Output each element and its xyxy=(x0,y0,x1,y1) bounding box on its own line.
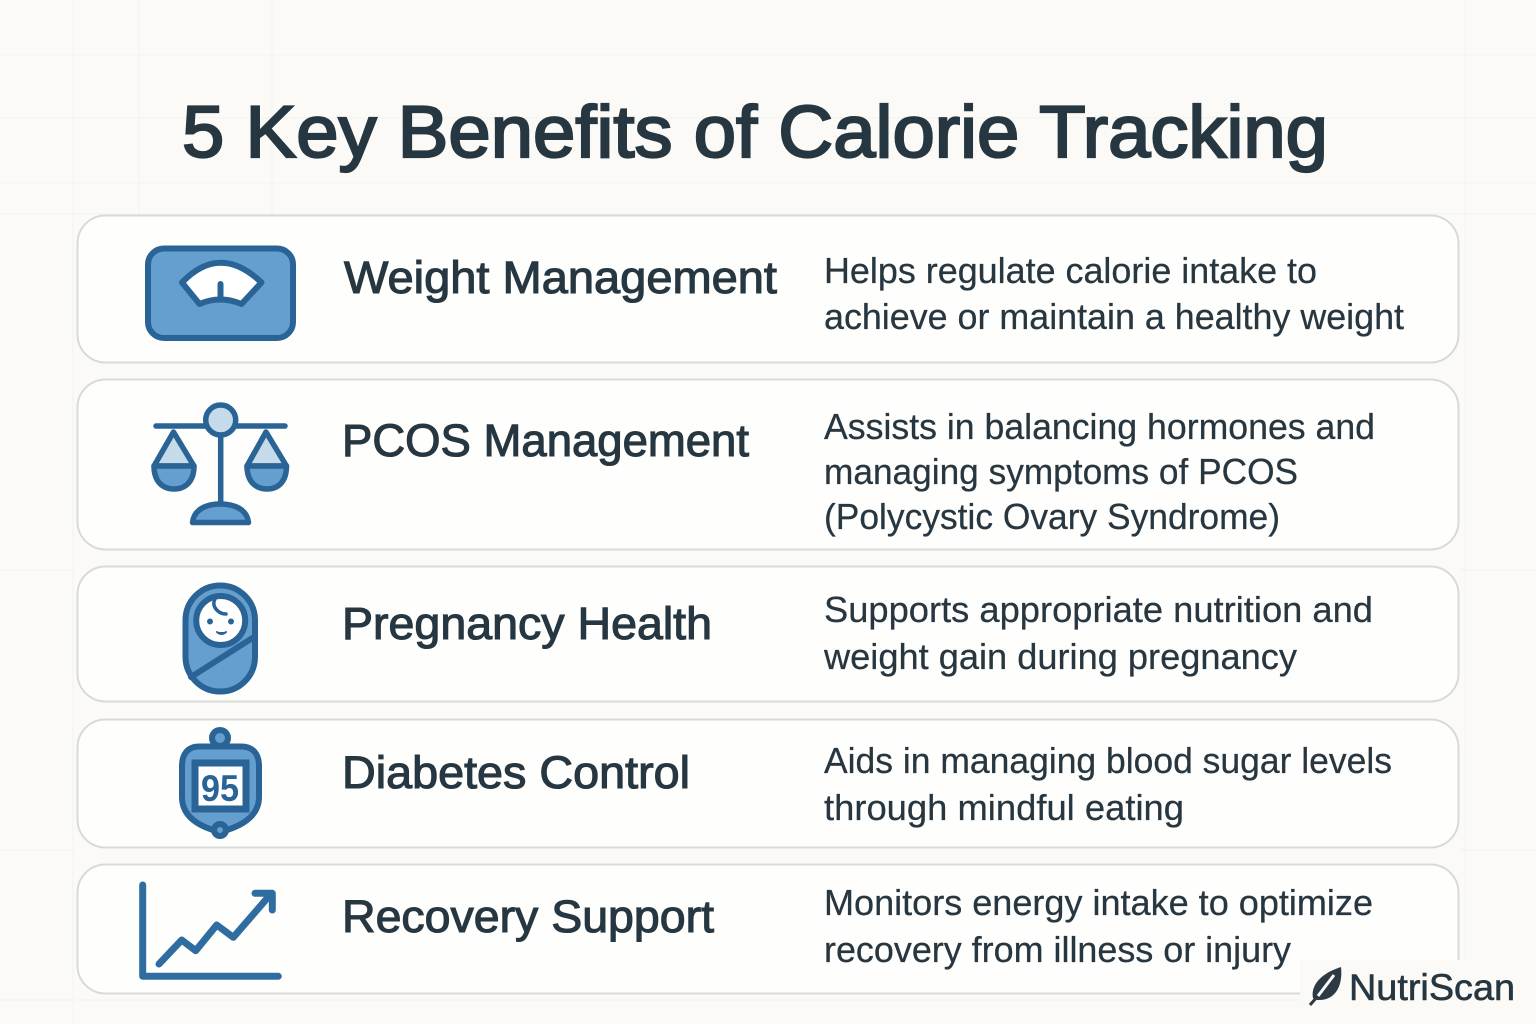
description: weight management: Helps regulate calorie intake to xyxy=(824,250,1317,291)
panel: recovery support xyxy=(78,864,1458,994)
description: weight management xyxy=(824,250,1404,337)
description: diabetes control: Aids in managing blood sugar levels xyxy=(824,740,1392,781)
icon: glucose meter: 95 xyxy=(201,768,239,809)
heading: pcos management: PCOS Management xyxy=(342,415,749,466)
icon: glucose meter xyxy=(182,730,259,836)
icon: swaddled baby xyxy=(186,586,255,692)
panel: weight management xyxy=(78,216,1458,362)
heading: pregnancy health: Pregnancy Health xyxy=(342,598,712,649)
panel: pcos management xyxy=(78,380,1458,550)
wordmark: NutriScan xyxy=(1349,967,1515,1008)
heading: recovery support: Recovery Support xyxy=(342,891,715,942)
description: pregnancy health: Supports appropriate nutrition and xyxy=(824,589,1373,630)
description: pregnancy health xyxy=(823,589,1373,677)
icon: balance scales xyxy=(154,405,286,522)
logo: NutriScan xyxy=(1310,967,1515,1008)
panel: diabetes control xyxy=(78,720,1458,848)
description: recovery support: recovery from illness or injury xyxy=(824,929,1291,970)
description: pcos management: managing symptoms of PCOS xyxy=(824,451,1298,492)
title: 5 Key Benefits of Calorie Tracking xyxy=(182,92,1328,173)
description: recovery support: Monitors energy intake to optimize xyxy=(824,882,1373,923)
description: diabetes control xyxy=(824,740,1392,828)
heading: weight management: Weight Management xyxy=(344,252,778,303)
icon: leaf xyxy=(1310,967,1341,1005)
description: recovery support xyxy=(824,882,1373,970)
panel: pregnancy health xyxy=(78,566,1458,702)
description: pcos management: (Polycystic Ovary Syndrome) xyxy=(824,496,1280,537)
description: diabetes control: through mindful eating xyxy=(824,787,1184,828)
description: pcos management: Assists in balancing hormones and xyxy=(824,406,1375,447)
icon: rising chart xyxy=(143,885,278,976)
icon: bathroom scale xyxy=(148,248,293,338)
heading: diabetes control: Diabetes Control xyxy=(342,747,690,798)
description: pcos management xyxy=(824,406,1375,537)
description: pregnancy health: weight gain during pregnancy xyxy=(823,636,1297,677)
description: weight management: achieve or maintain a healthy weight xyxy=(824,296,1404,337)
